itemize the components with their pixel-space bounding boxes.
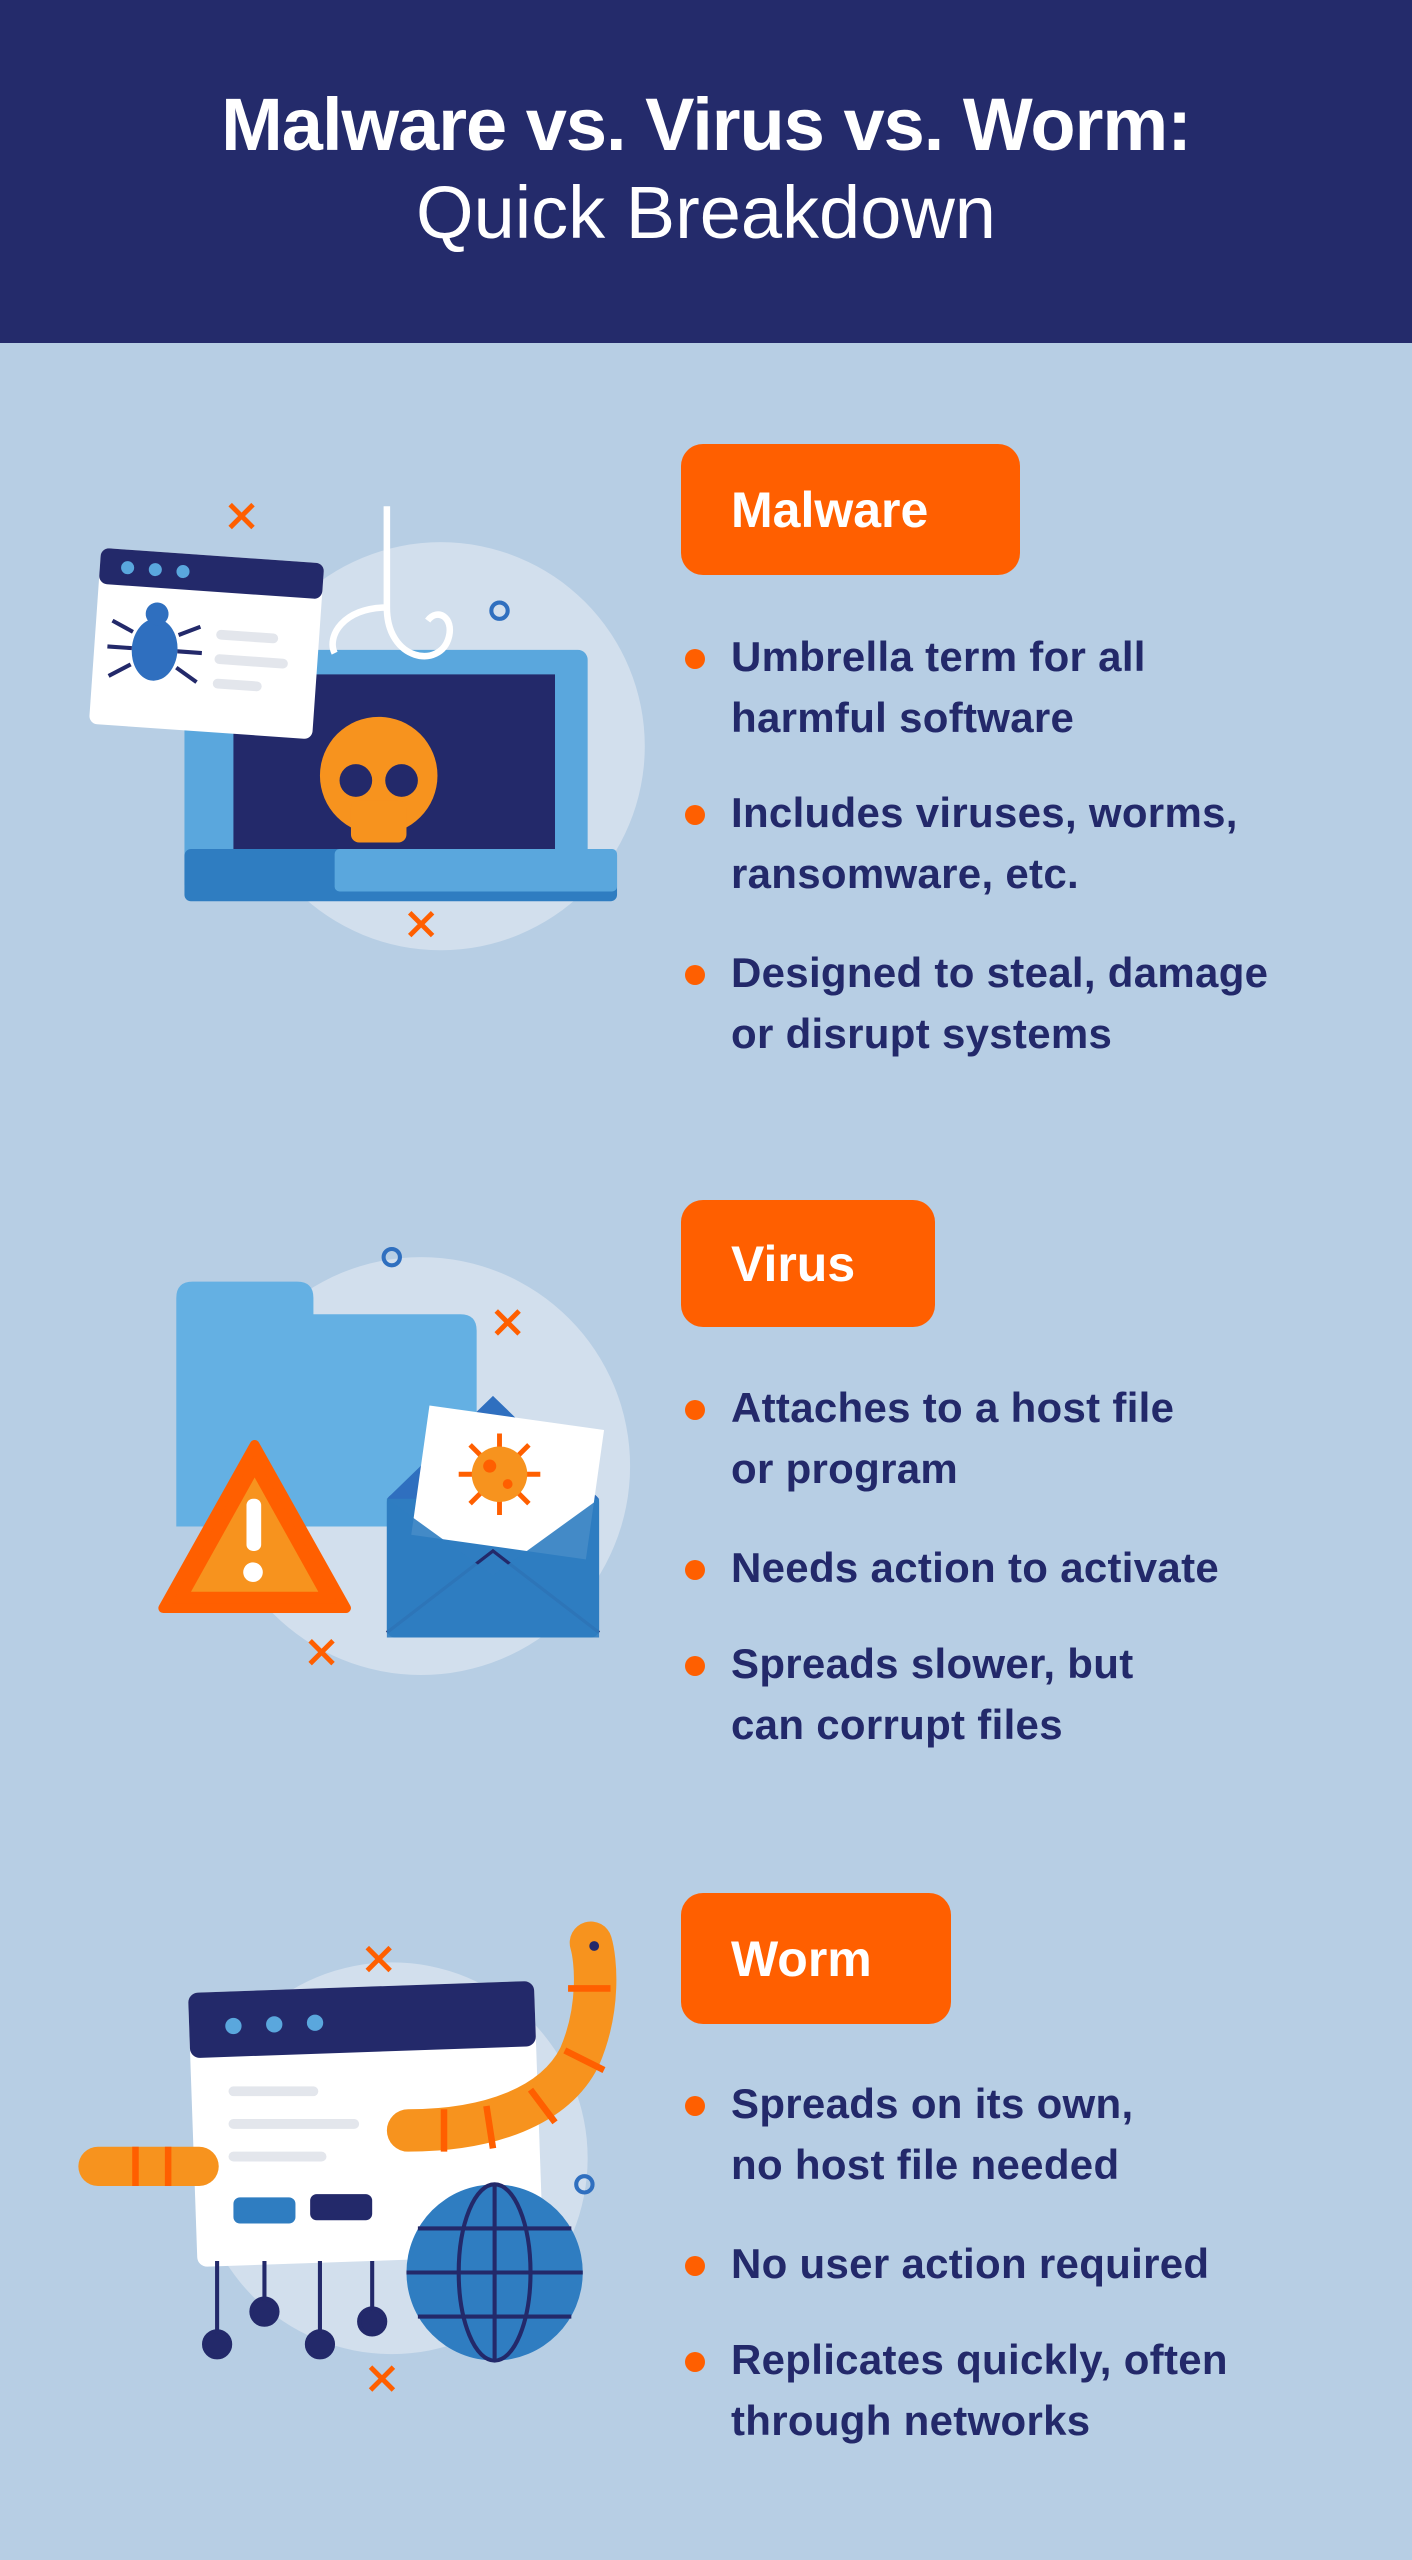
title: Malware vs. Virus vs. Worm: xyxy=(221,83,1191,166)
icon: skull xyxy=(320,717,437,843)
bullet: virus 1: Attaches to a host file xyxy=(731,1384,1174,1431)
browser window with bug xyxy=(89,548,324,739)
bullet: malware 2: Includes viruses, worms, xyxy=(731,789,1238,836)
icon: worm xyxy=(98,2154,199,2178)
bullet: worm 1 xyxy=(731,2073,1133,2195)
bullet: malware 1 xyxy=(731,626,1146,748)
tag: virus: Virus xyxy=(731,1236,855,1292)
subtitle: Quick Breakdown xyxy=(416,171,996,254)
bullet: virus 1: or program xyxy=(731,1445,958,1492)
icon: envelope xyxy=(387,1494,599,1637)
illustration: worm browser globe xyxy=(98,1941,611,2390)
bullet: virus 1 xyxy=(731,1377,1174,1499)
bullet: malware 2 xyxy=(731,782,1238,904)
bullet: worm 1: Spreads on its own, xyxy=(731,2080,1133,2127)
tag: malware xyxy=(681,444,1020,575)
bullet: worm 3 xyxy=(731,2329,1228,2451)
tag: worm xyxy=(681,1893,951,2024)
bullet: malware 1: harmful software xyxy=(731,694,1074,741)
bullet: virus 3 xyxy=(731,1633,1134,1755)
bullet: worm 3: through networks xyxy=(731,2397,1090,2444)
bullet: virus 2: Needs action to activate xyxy=(731,1544,1219,1591)
bullet: malware 1: Umbrella term for all xyxy=(731,633,1146,680)
bullet: malware 3: or disrupt systems xyxy=(731,1010,1112,1057)
bullet: malware 3: Designed to steal, damage xyxy=(731,949,1268,996)
icon: globe xyxy=(406,2184,583,2361)
illustration: virus folder and email xyxy=(163,1249,630,1675)
bullet: malware 2: ransomware, etc. xyxy=(731,850,1079,897)
illustration: malware laptop xyxy=(89,505,645,950)
header xyxy=(0,0,1412,343)
icon: virus xyxy=(459,1433,540,1515)
icon: warning triangle xyxy=(163,1445,346,1608)
tag: worm: Worm xyxy=(731,1930,872,1986)
hook xyxy=(387,506,450,656)
bullet: worm 1: no host file needed xyxy=(731,2141,1119,2188)
bullet: virus 3: Spreads slower, but xyxy=(731,1640,1134,1687)
tag: virus xyxy=(681,1200,935,1327)
bullet: worm 2: No user action required xyxy=(731,2240,1209,2287)
bullet: malware 3 xyxy=(731,942,1268,1064)
tag: malware: Malware xyxy=(731,482,928,538)
bullet: virus 3: can corrupt files xyxy=(731,1701,1063,1748)
bullet: worm 3: Replicates quickly, often xyxy=(731,2336,1228,2383)
network nodes xyxy=(204,2261,385,2357)
